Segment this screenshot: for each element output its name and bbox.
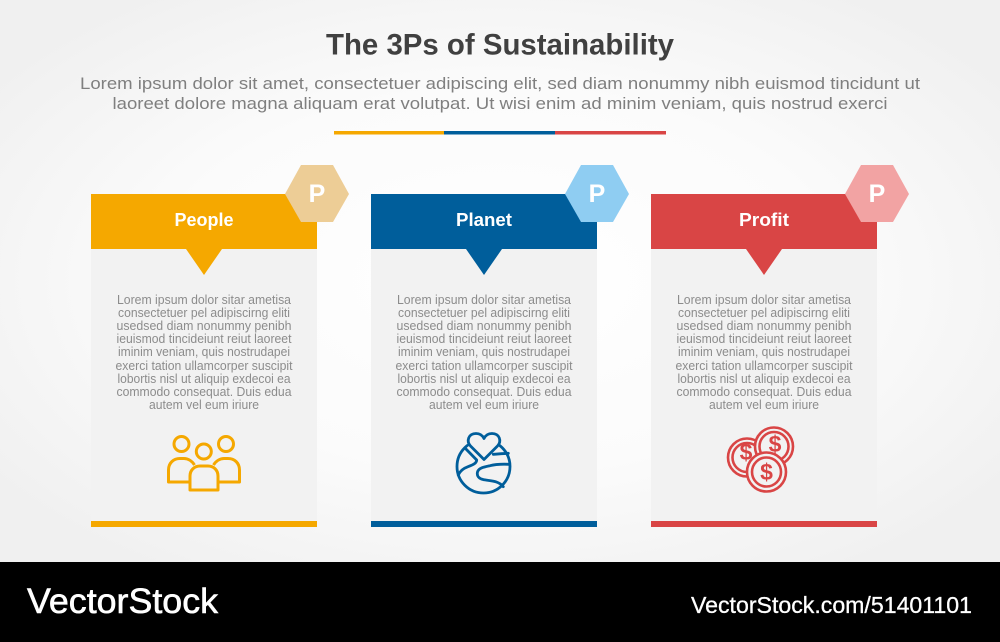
body text: Lorem ipsum dolor sitar ametisa [397,293,571,307]
body text: Lorem ipsum dolor sitar ametisa [677,293,851,307]
body text: consectetuer pel adipiscirng eliti [118,306,290,320]
header banner with pointer [371,194,597,275]
body text: commodo consequat. Duis edua [396,385,572,399]
body text [396,293,573,412]
bottom bar [651,521,877,527]
body text: ieuismod tincideiunt reiut laoreet [116,332,292,346]
bottom bar [91,521,317,527]
body text: consectetuer pel adipiscirng eliti [678,306,850,320]
hexagon badge: P [309,180,325,208]
intro text block: Lorem ipsum dolor sit amet, consectetuer adipiscing elit, sed diam nonummy nibh euismod tincidunt ut [80,74,920,93]
header banner with pointer [91,194,317,275]
intro text block [80,74,920,113]
bottom bar [371,521,597,527]
body text: commodo consequat. Duis edua [116,385,292,399]
body text: usedsed diam nonummy penibh [676,319,852,333]
icon: coins: $ [740,439,753,465]
body text: ieuismod tincideiunt reiut laoreet [396,332,572,346]
body text: Lorem ipsum dolor sitar ametisa [117,293,291,307]
icon: coins: $ [769,431,782,457]
intro text block: laoreet dolore magna aliquam erat volutpat. Ut wisi enim ad minim veniam, quis nostrud exerci [112,94,888,113]
hexagon badge: P [589,180,605,208]
body text: autem vel eum iriure [429,398,539,412]
card body [91,249,317,521]
panel: planet [371,165,629,527]
body text: iminim veniam, quis nostrudapei [118,345,290,359]
body text: exerci tation ullamcorper suscipit [116,359,293,373]
body text: lobortis nisl ut aliquip exdecoi ea [118,372,291,386]
heading: Planet [456,210,512,230]
body text: exerci tation ullamcorper suscipit [396,359,573,373]
hexagon badge: P [869,180,885,208]
hexagon badge [285,165,349,222]
icon: coins [728,428,793,492]
card body [651,249,877,521]
body text: iminim veniam, quis nostrudapei [398,345,570,359]
body text: autem vel eum iriure [709,398,819,412]
hexagon badge [845,165,909,222]
hexagon badge [565,165,629,222]
brand name: VectorStock [27,582,219,621]
body text: usedsed diam nonummy penibh [396,319,572,333]
body text: usedsed diam nonummy penibh [116,319,292,333]
panel: profit [651,165,909,527]
body text: autem vel eum iriure [149,398,259,412]
heading: People [174,210,234,230]
icon: planet with heart [457,434,510,493]
tricolor divider [334,131,666,134]
panel: people [91,165,349,527]
icon: people [168,436,240,490]
body text: exerci tation ullamcorper suscipit [676,359,853,373]
card body [371,249,597,521]
body text: lobortis nisl ut aliquip exdecoi ea [398,372,571,386]
body text: lobortis nisl ut aliquip exdecoi ea [678,372,851,386]
body text: ieuismod tincideiunt reiut laoreet [676,332,852,346]
watermark footer [0,562,1000,642]
header banner with pointer [651,194,877,275]
body text: consectetuer pel adipiscirng eliti [398,306,570,320]
body text: iminim veniam, quis nostrudapei [678,345,850,359]
image reference: VectorStock.com/51401101 [691,592,972,618]
icon: coins: $ [760,459,773,485]
body text [676,293,853,412]
body text: commodo consequat. Duis edua [676,385,852,399]
heading: Profit [739,210,789,230]
title: The 3Ps of Sustainability [326,28,674,62]
body text [116,293,293,412]
